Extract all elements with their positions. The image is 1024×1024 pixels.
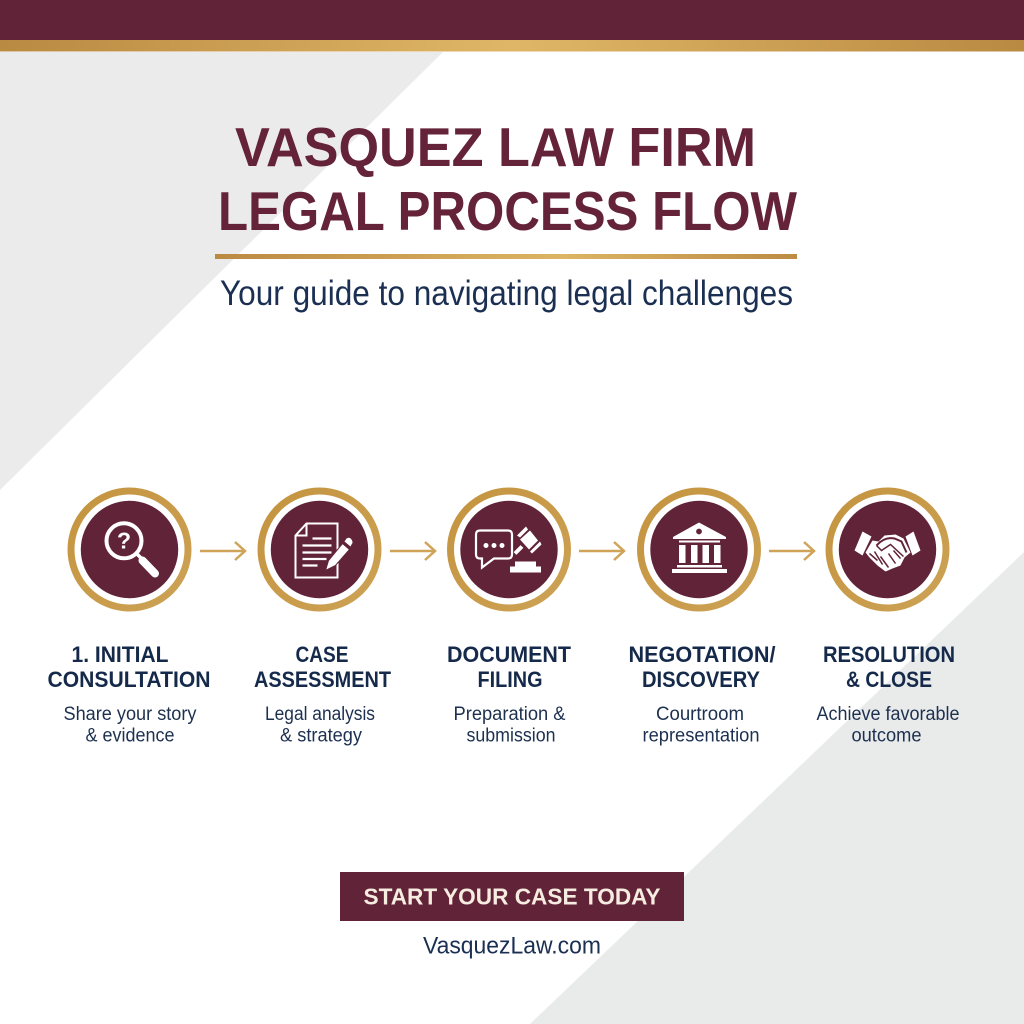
background wedge: bottom right: [530, 552, 1024, 1024]
step 2 label: & strategy: [280, 726, 362, 746]
step 4 label: representation: [642, 726, 760, 746]
step 1 label: Share your story: [64, 704, 197, 725]
step 1 icon: magnifying glass with question mark: [71, 491, 188, 608]
website: VasquezLaw.com: [423, 932, 601, 960]
step 4 label: DISCOVERY: [642, 667, 760, 692]
step 5 label: RESOLUTION: [823, 642, 955, 667]
step 1 icon: magnifying glass with question mark: ?: [117, 528, 131, 554]
call to action button: START YOUR CASE TODAY: [364, 884, 661, 910]
step 4 icon: courthouse: [640, 491, 758, 608]
step 1 label: [48, 642, 210, 746]
step 2 label: ASSESSMENT: [254, 667, 391, 692]
arrow 3: [579, 542, 624, 560]
arrow 1: [200, 542, 245, 560]
arrow 4: [769, 542, 814, 560]
step 4 label: Courtroom: [656, 704, 744, 725]
title: VASQUEZ LAW FIRM: [235, 116, 756, 178]
title: LEGAL PROCESS FLOW: [218, 180, 797, 242]
step 3 label: Preparation &: [454, 704, 566, 725]
subtitle: Your guide to navigating legal challenges: [220, 274, 793, 313]
step 3 icon: speech bubble and gavel: [450, 491, 568, 608]
step 2 label: Legal analysis: [265, 704, 375, 725]
top banner: [0, 0, 1024, 52]
title rule: [215, 254, 797, 259]
step 2 label: CASE: [296, 642, 348, 667]
step 5 label: & CLOSE: [846, 667, 932, 692]
step 5 label: outcome: [852, 726, 922, 746]
step 4 label: [628, 642, 776, 746]
background wedge: top left: [0, 52, 443, 490]
step 3 label: FILING: [478, 667, 542, 692]
step 1 label: & evidence: [86, 726, 174, 746]
step 1 label: 1. INITIAL: [72, 642, 169, 667]
call to action button: [340, 872, 684, 921]
step 3 label: submission: [466, 726, 556, 746]
step 5 label: [816, 642, 960, 746]
step 2 label: [254, 642, 391, 746]
step 3 label: DOCUMENT: [447, 642, 571, 667]
step 2 icon: document and pen: [261, 491, 378, 608]
arrow 2: [390, 542, 435, 560]
step 3 label: [447, 642, 571, 746]
step 4 label: NEGOTATION/: [628, 642, 776, 667]
step 5 icon: handshake: [829, 491, 946, 608]
title: [218, 116, 797, 242]
step 5 label: Achieve favorable: [816, 704, 960, 725]
step 1 label: CONSULTATION: [48, 667, 210, 692]
